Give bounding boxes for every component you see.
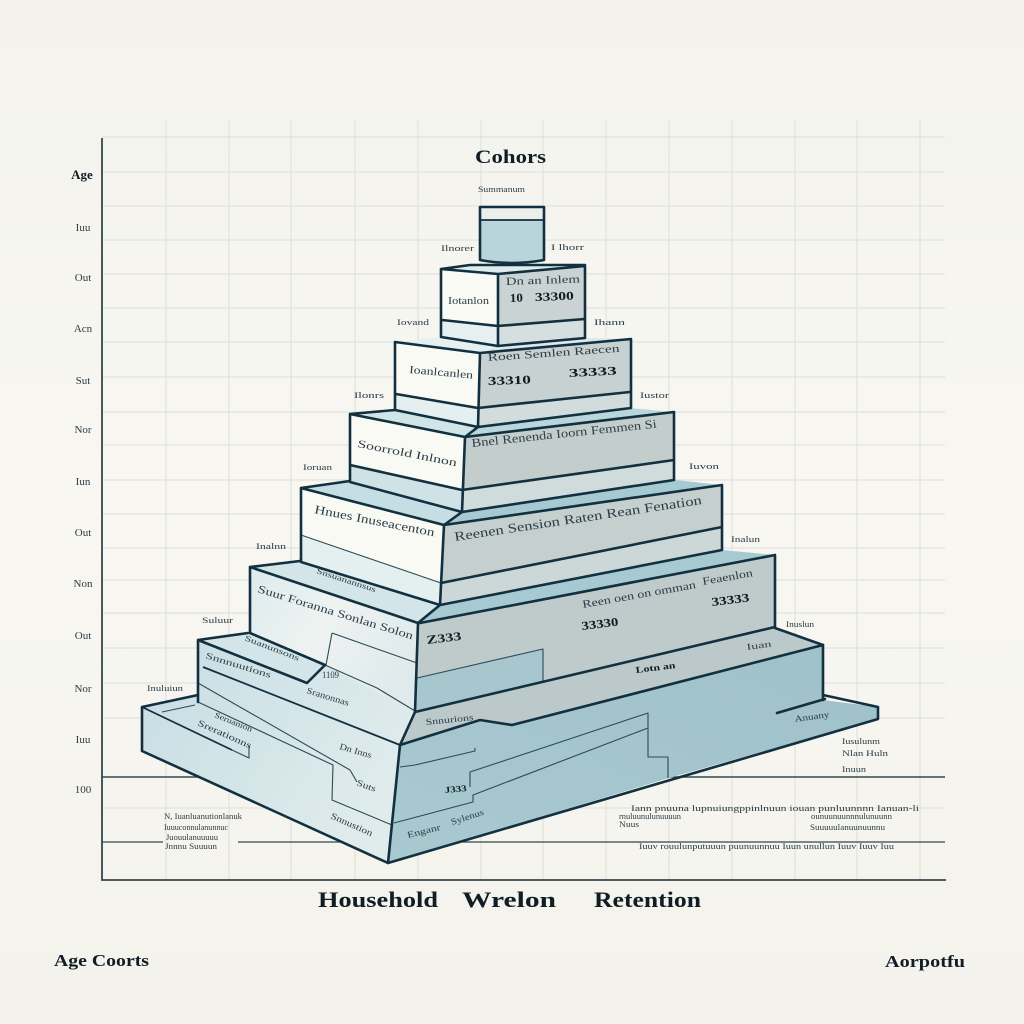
tier 2 labels: Sranonnas — [305, 685, 351, 708]
tier 2 labels: 1109 — [322, 670, 339, 680]
side tier labels: Inuluiun — [147, 683, 184, 693]
tier 1 labels: Seruanion — [213, 711, 254, 734]
left bottom note — [164, 812, 242, 851]
tier 1 labels: J333 — [444, 783, 468, 795]
y-axis labels: 100 — [75, 784, 92, 796]
tier 3 labels: Suur Foranna Sonlan Solon — [256, 583, 415, 642]
tier 2 labels: Iuan — [746, 638, 773, 652]
y-axis labels: Age — [71, 167, 93, 182]
side tier labels: Inalun — [731, 534, 761, 544]
tier 6 — [395, 337, 631, 427]
tier 6 labels: Ioanlcanlen — [409, 364, 474, 382]
y-axis labels: Out — [75, 272, 91, 284]
tier 5 labels: Bnel Renenda Ioorn Femmen Si — [471, 417, 658, 450]
left bottom note: N, Iuanluanutionlanuk — [164, 812, 242, 821]
side tier labels: Summanum — [478, 184, 525, 194]
side tier labels: Ilonrs — [354, 390, 384, 400]
tier 7 — [441, 265, 585, 346]
y-axis labels: Nor — [74, 424, 92, 436]
tier 7 labels: 10 — [510, 291, 523, 305]
side tier labels: Iovand — [397, 317, 430, 327]
side tier labels: Iuvon — [689, 461, 720, 471]
right bottom note: ounuunuunnnulunuunn — [811, 812, 892, 821]
tier 7 labels: Iotanlon — [448, 295, 490, 307]
y-axis labels: Acn — [74, 323, 93, 335]
tier 3 labels: Snsuanannsus — [315, 566, 377, 594]
y-axis labels: Sut — [76, 375, 90, 387]
right note — [842, 736, 889, 774]
tier 3 labels: Feaenlon — [701, 567, 754, 588]
right bottom note: Iann pnuuna lupnuiungppinlnuun iouan punluunnnn Ianuan-li — [631, 804, 920, 813]
tier 2 labels: Snnurions — [425, 712, 475, 727]
tier 1 labels: Srerationns — [196, 718, 254, 751]
side tier labels: Iustor — [640, 390, 669, 400]
title: Cohors — [475, 147, 546, 168]
tier 3 labels: Z333 — [426, 629, 462, 647]
tier 1 labels: Enganr — [406, 822, 441, 840]
tier 3 labels: Reen oen on omman — [581, 579, 697, 611]
tier 1 labels: Snnustion — [329, 811, 375, 838]
left bottom note: Juouulanuuuuu — [166, 833, 218, 842]
tier 1 labels: Anuany — [794, 709, 831, 724]
side tier labels: Suluur — [202, 615, 233, 625]
tier 4 labels: Hnues Inuseacenton — [313, 502, 436, 539]
tier 2 labels — [204, 633, 773, 727]
right bottom note: Nuus — [619, 820, 639, 829]
y-axis labels: Non — [74, 578, 93, 590]
y-axis labels: Nor — [74, 683, 92, 695]
footer right: Aorpotfu — [885, 952, 965, 971]
y-axis labels: Iuu — [76, 222, 91, 234]
left bottom note: Jnnnu Suuuun — [165, 842, 217, 851]
tier 4 labels — [313, 492, 703, 544]
tier 6 labels — [409, 343, 621, 388]
tier 3 labels: 33330 — [581, 615, 619, 633]
tier 2 labels: Suanunsons — [243, 633, 301, 663]
tier 7 labels: 33300 — [535, 289, 574, 304]
right bottom note: Suuuuulanuunuunnu — [810, 823, 885, 832]
right note: Inuun — [842, 764, 867, 774]
side tier labels: Ilnorer — [441, 243, 474, 253]
y-axis labels: Iun — [76, 476, 91, 488]
left bottom note: Iuuuconnulanunnuc — [164, 823, 228, 832]
tier 2 labels: Snnnuutions — [204, 650, 273, 680]
tier 4 — [301, 480, 722, 605]
tier 1 labels: Sylenus — [450, 807, 486, 827]
right bottom note — [619, 804, 920, 851]
tier 1 labels — [196, 709, 831, 840]
tier 3 labels: 33333 — [711, 590, 750, 609]
tier 3 — [250, 550, 775, 712]
top cylinder — [480, 207, 544, 264]
x-axis title — [318, 887, 701, 912]
side tier labels: Ioruan — [303, 462, 333, 472]
tier 7 labels — [448, 273, 581, 307]
right note: Nlan Huln — [842, 748, 889, 758]
tier 2 labels: Lotn an — [635, 660, 676, 675]
tier 3 labels — [256, 566, 754, 647]
tier 5 labels — [356, 417, 658, 469]
side tier labels: Inuslun — [786, 619, 815, 629]
x-axis title: Wrelon — [462, 887, 556, 912]
side tier labels — [147, 184, 815, 693]
tier 4 labels: Reenen Sension Raten Rean Fenation — [453, 492, 703, 544]
tier 1: base — [142, 640, 878, 863]
y-axis labels: Out — [75, 527, 91, 539]
footer left: Age Coorts — [54, 951, 149, 970]
axes and baselines — [102, 138, 946, 880]
tier 1 labels: Dn Inns — [338, 741, 373, 760]
tier 6 labels: 33333 — [568, 364, 617, 380]
tier 5 labels: Soorrold Inlnon — [356, 438, 459, 469]
tier 7 labels: Dn an Inlem — [506, 273, 581, 288]
y-axis labels — [71, 167, 93, 796]
right note: Iusulunm — [842, 736, 880, 746]
tier 5 — [350, 408, 674, 512]
tier 2 — [198, 628, 823, 782]
tier 6 labels: Roen Semlen Raecen — [487, 343, 621, 364]
tier 1 labels: Suts — [355, 777, 378, 794]
y-axis labels: Out — [75, 630, 91, 642]
y-axis labels: Iuu — [76, 734, 91, 746]
side tier labels: Ihann — [594, 317, 626, 327]
tier 6 labels: 33310 — [488, 373, 531, 388]
side tier labels: I lhorr — [551, 242, 584, 252]
right bottom note: Iuuv rouulunputuuun puunuunnuu Iuun unullun Iuuv Iuuv Iuu — [639, 842, 894, 851]
x-axis title: Household — [318, 887, 438, 912]
grid — [102, 120, 945, 880]
side tier labels: Inalnn — [256, 541, 287, 551]
right bottom note: rnuluunulunuuuun — [619, 812, 681, 821]
x-axis title: Retention — [594, 887, 701, 912]
